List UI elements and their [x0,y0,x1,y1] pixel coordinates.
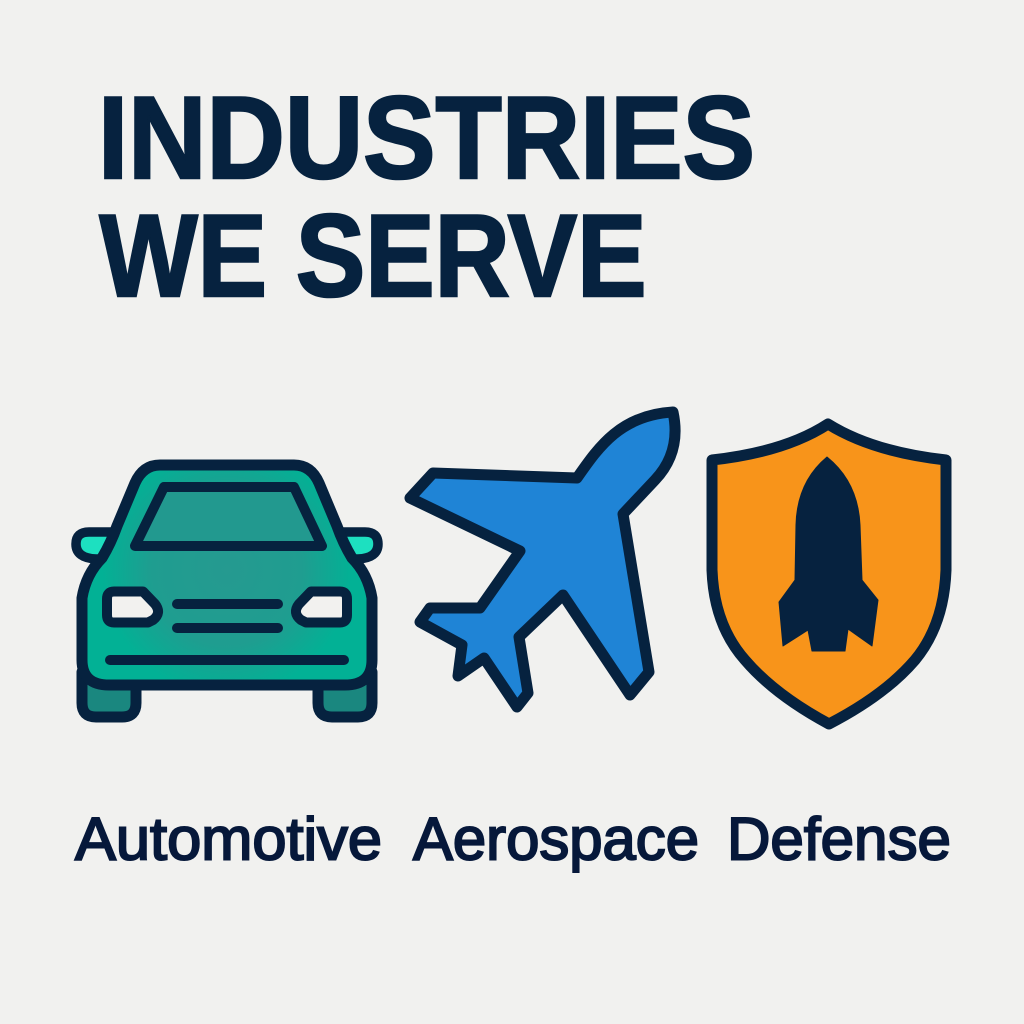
title line 2: WE SERVE [100,190,646,321]
title line 1: INDUSTRIES [98,72,755,203]
rocket [779,457,878,651]
car body [82,465,372,685]
car headlights [107,592,347,622]
label: Automotive: Automotive [75,806,382,872]
icon: car [76,465,378,717]
label: Defense: Defense [727,806,951,872]
car windshield [135,487,322,546]
labels [75,806,951,872]
car mirrors [76,532,378,559]
icon: shield with rocket [712,424,946,724]
car wheels [82,672,372,717]
icon: airplane [410,412,675,707]
label: Aerospace: Aerospace [413,806,699,872]
car grille [177,604,278,628]
title [98,72,755,321]
car bumper line [110,655,344,665]
shield [712,424,946,724]
